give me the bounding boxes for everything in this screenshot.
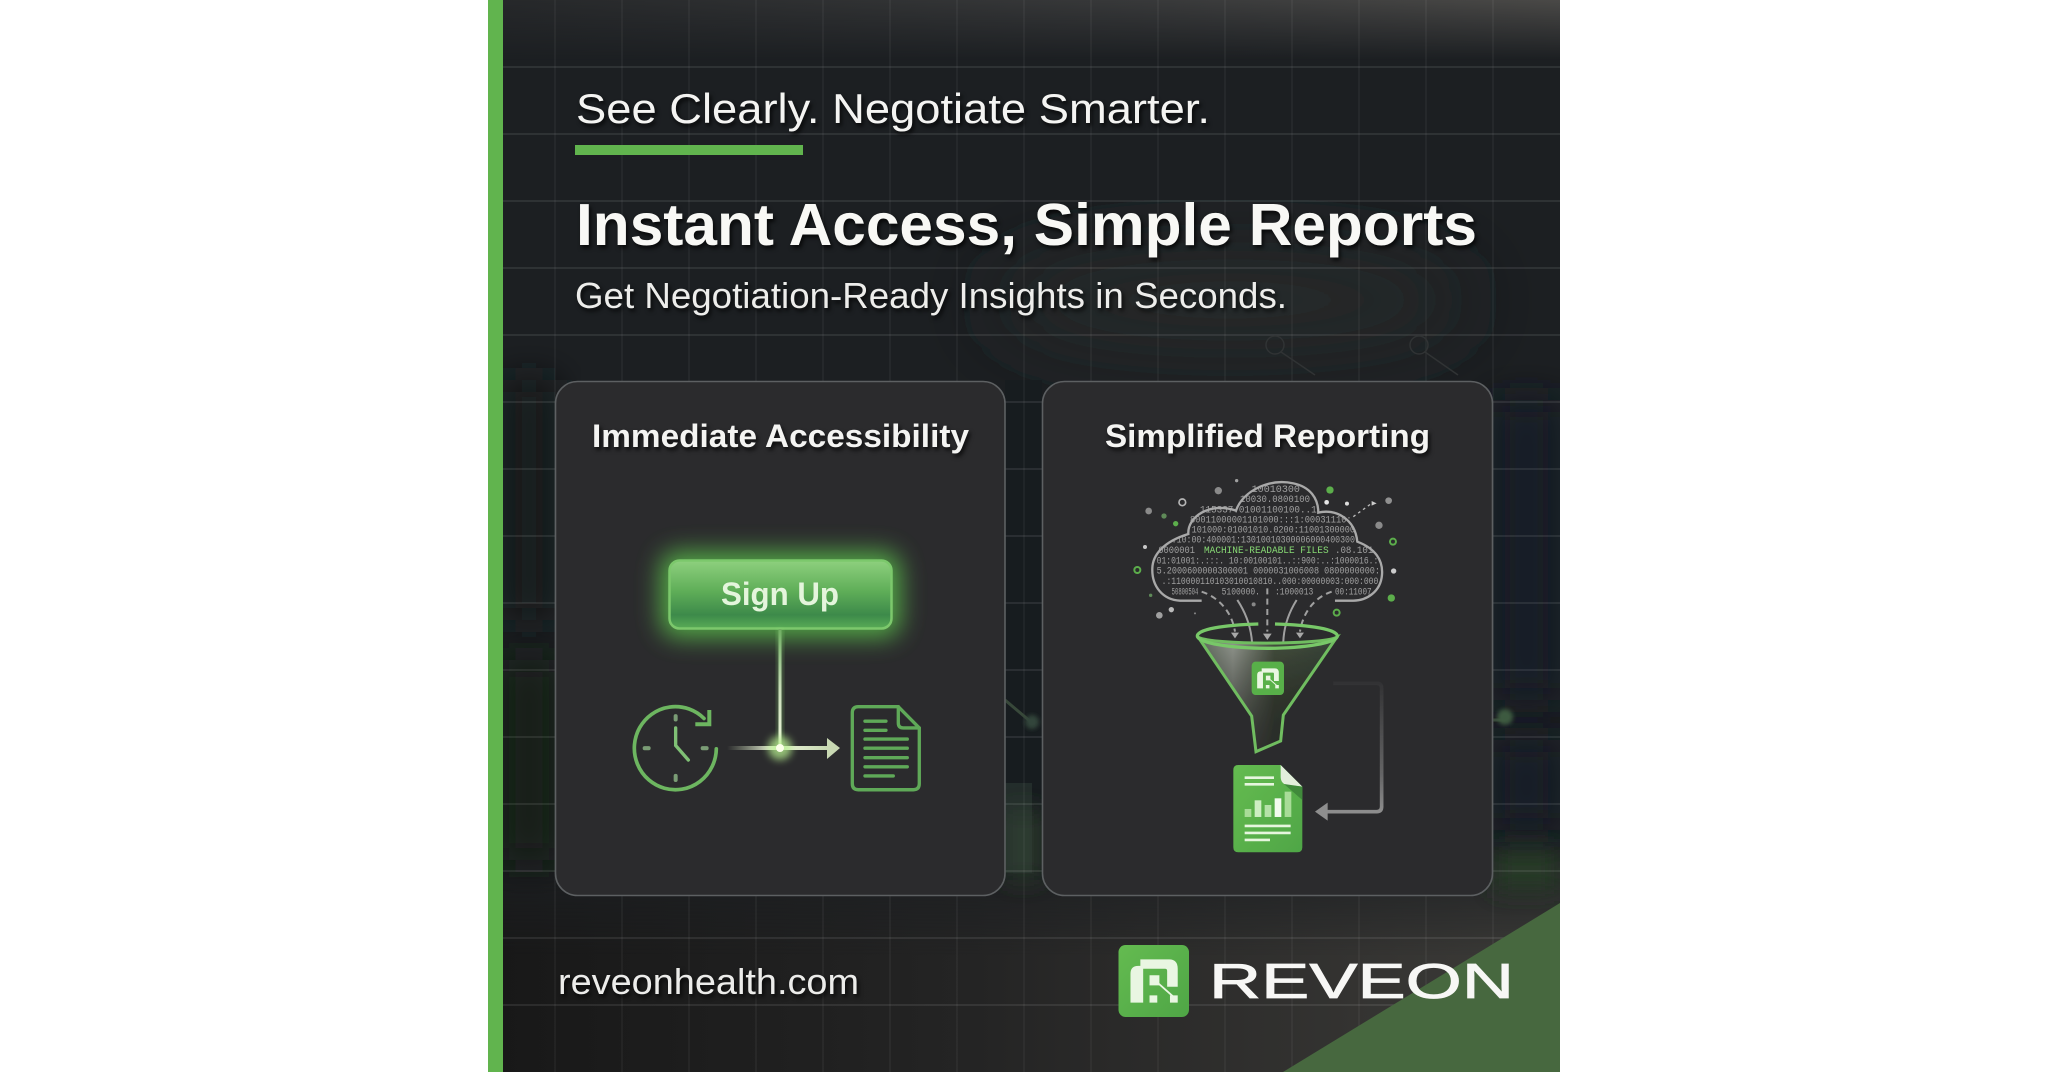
icon: document	[852, 707, 919, 790]
particles	[1134, 479, 1396, 619]
website url: reveonhealth.com	[558, 961, 859, 1002]
cloud of machine-readable data	[1134, 479, 1396, 642]
binary text: 0000001	[1158, 545, 1195, 556]
tagline underline	[575, 145, 803, 155]
logo icon	[1118, 945, 1189, 1017]
binary text: MACHINE-READABLE FILES	[1204, 545, 1329, 556]
icon: report document	[1233, 765, 1302, 852]
panel heading: simplified reporting: Simplified Reporting	[1105, 418, 1430, 454]
main heading: Instant Access, Simple Reports	[576, 192, 1477, 258]
binary text: 5100000.	[1222, 586, 1260, 597]
binary text: 10030.0800100	[1240, 494, 1310, 505]
flow arrows into funnel	[1202, 588, 1332, 642]
binary text: 01:01001:.:::. 10:00100101..::900:..:1000016.:	[1157, 555, 1378, 566]
cloud outline	[1152, 482, 1382, 601]
icon: sign up button: Sign Up	[721, 576, 839, 612]
subheading: Get Negotiation-Ready Insights in Seconds.	[575, 275, 1287, 316]
binary text: :1000013	[1275, 586, 1313, 597]
binary text: 101000:01001010.0200:11001300000	[1192, 525, 1355, 536]
panel: immediate accessibility	[556, 382, 1005, 896]
binary text: 80011000001101000:::1:00031110:	[1190, 515, 1352, 526]
logo wordmark: REVEON	[1209, 955, 1514, 1009]
binary text: .08.101	[1335, 545, 1373, 556]
binary text: .10:00:400001:13010010300006000400300	[1172, 535, 1355, 546]
binary text: 115337.01001100100..1	[1200, 505, 1317, 516]
connector arrow	[727, 629, 840, 760]
binary text	[1157, 484, 1380, 597]
return arrow	[1315, 683, 1382, 821]
panel: simplified reporting	[1042, 382, 1492, 896]
icon: clock	[634, 707, 716, 790]
binary text: .:110000110103010010810..000:00000003:000:000	[1162, 576, 1378, 587]
accent bar	[488, 0, 503, 1072]
binary text: 5.2000600000300001 0000031006008 0800000000:	[1157, 566, 1380, 577]
binary text: 00:11007	[1335, 586, 1372, 597]
binary text: 10010300	[1252, 484, 1300, 495]
binary text: 50800504	[1172, 586, 1198, 597]
logo: reveon	[1118, 945, 1514, 1017]
icon: sign up button	[660, 551, 901, 638]
panel heading: immediate accessibility: Immediate Accessibility	[592, 418, 969, 454]
tagline: See Clearly. Negotiate Smarter.	[576, 85, 1210, 132]
background	[488, 0, 1560, 1072]
funnel	[1197, 624, 1337, 752]
funnel logo badge	[1252, 662, 1284, 695]
